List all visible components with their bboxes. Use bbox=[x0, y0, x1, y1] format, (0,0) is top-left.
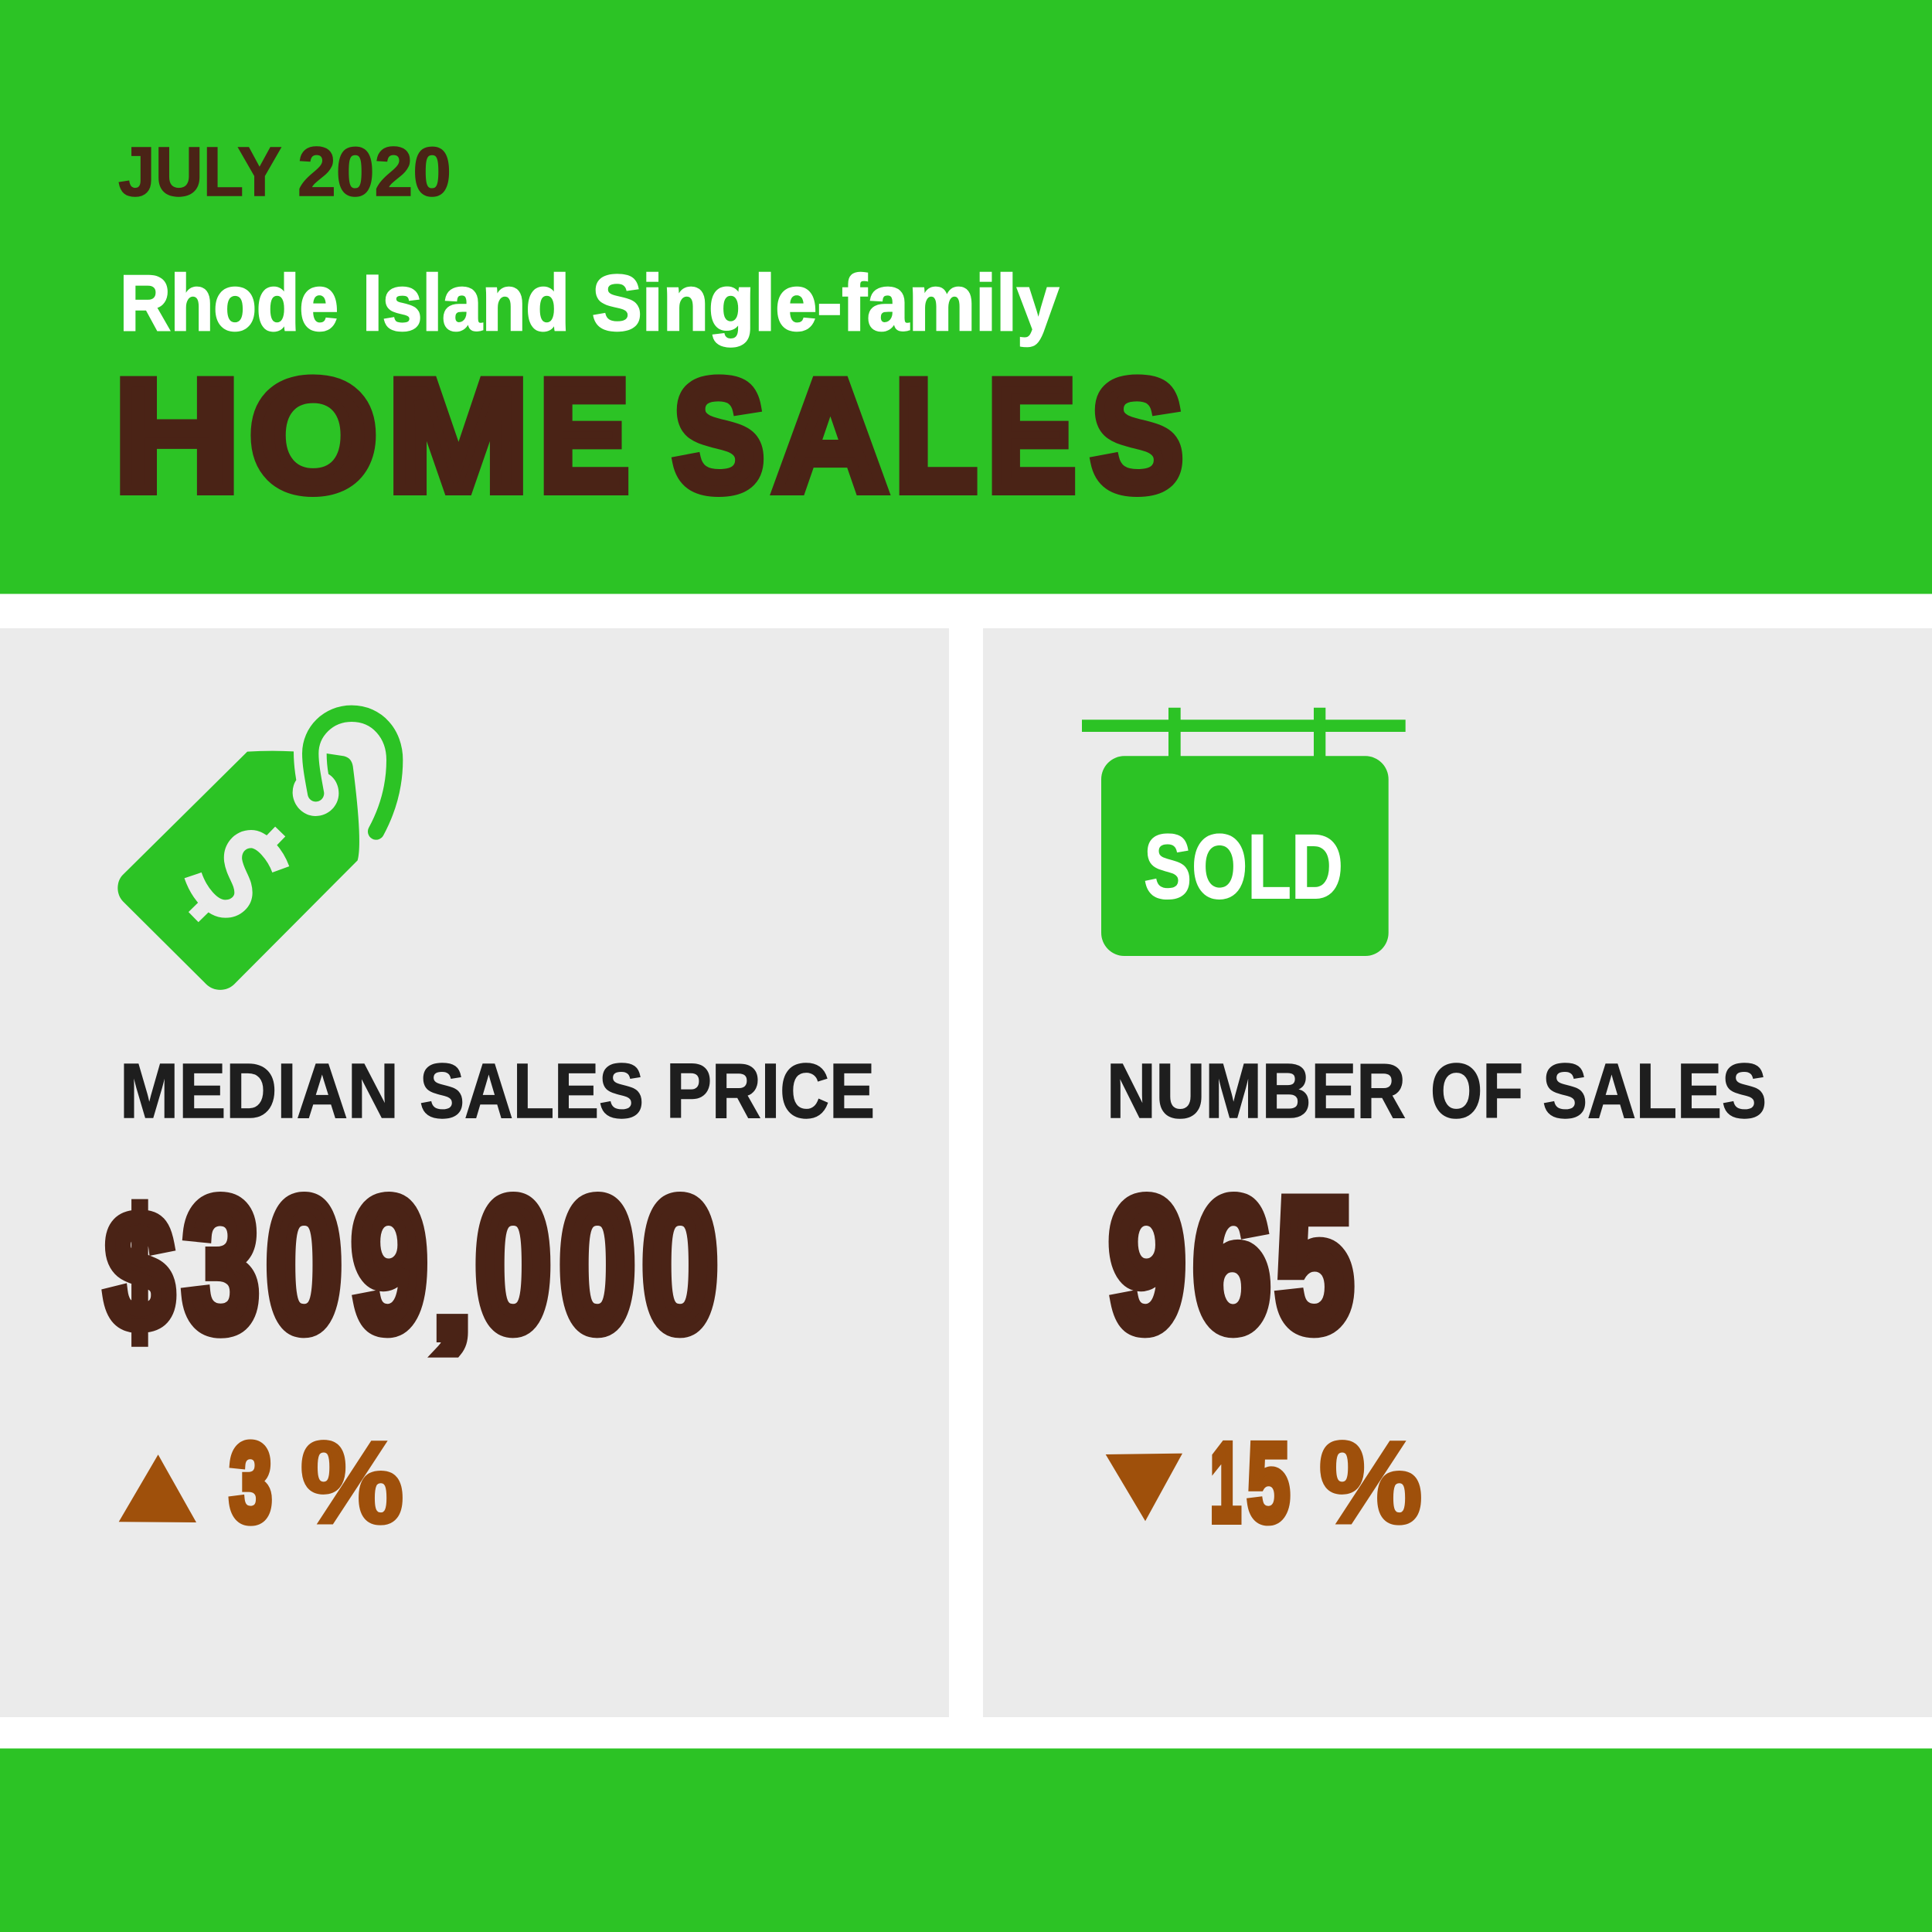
subtitle: Single-family bbox=[592, 259, 1059, 347]
title: S bbox=[673, 348, 764, 524]
title: A bbox=[774, 348, 887, 524]
change: median sales price: % bbox=[301, 1417, 403, 1547]
value: median sales price: 0 bbox=[642, 1161, 718, 1369]
sign label: SOLD bbox=[1144, 816, 1343, 918]
value: median sales price: $ bbox=[106, 1179, 173, 1362]
title: H bbox=[114, 348, 240, 524]
date heading: 2020 bbox=[298, 134, 451, 211]
label: median sales price: MEDIAN bbox=[120, 1048, 399, 1134]
subtitle: Island bbox=[362, 259, 570, 347]
change: number of sales: % bbox=[1319, 1417, 1422, 1547]
title: S bbox=[1091, 348, 1183, 524]
label: median sales price: PRICE bbox=[666, 1048, 875, 1134]
change: number of sales: 1 bbox=[1210, 1420, 1241, 1545]
title: M bbox=[388, 348, 529, 524]
sign board bbox=[1101, 756, 1389, 956]
value: number of sales: 9 bbox=[1109, 1161, 1185, 1369]
panel: footer band bbox=[0, 1748, 1932, 1932]
change: median sales price bbox=[230, 1417, 403, 1547]
sign rail bbox=[1082, 719, 1406, 732]
change: median sales price: 3 bbox=[230, 1420, 272, 1545]
title: E bbox=[988, 348, 1076, 524]
value: median sales price: 3 bbox=[183, 1161, 259, 1369]
value: median sales price: , bbox=[437, 1247, 468, 1356]
label: number of sales: NUMBER bbox=[1107, 1048, 1406, 1134]
icon: up triangle bbox=[119, 1454, 196, 1522]
icon: price tag bbox=[117, 713, 395, 990]
title: L bbox=[895, 348, 977, 524]
value: median sales price: 0 bbox=[475, 1161, 551, 1369]
panel: median sales price bbox=[0, 628, 949, 1717]
change: number of sales bbox=[1210, 1417, 1422, 1547]
panel: header band bbox=[0, 0, 1932, 594]
panel: number of sales bbox=[983, 628, 1932, 1717]
value: median sales price: 9 bbox=[352, 1161, 427, 1369]
title: E bbox=[539, 348, 629, 524]
label: number of sales: OF bbox=[1430, 1048, 1523, 1134]
icon: down triangle bbox=[1106, 1454, 1182, 1521]
value: median sales price: 0 bbox=[560, 1161, 635, 1369]
title: O bbox=[250, 348, 377, 524]
icon: sold sign bbox=[1082, 708, 1406, 956]
value: number of sales: 5 bbox=[1276, 1161, 1353, 1369]
date heading: JULY bbox=[118, 134, 281, 211]
value: median sales price: 0 bbox=[266, 1161, 342, 1369]
subtitle: Rhode bbox=[120, 259, 338, 347]
label: number of sales: SALES bbox=[1543, 1048, 1767, 1134]
sign posts bbox=[1168, 708, 1325, 757]
value: number of sales: 6 bbox=[1193, 1161, 1270, 1369]
change: number of sales: 5 bbox=[1247, 1420, 1290, 1545]
label: median sales price: SALES bbox=[420, 1048, 644, 1134]
